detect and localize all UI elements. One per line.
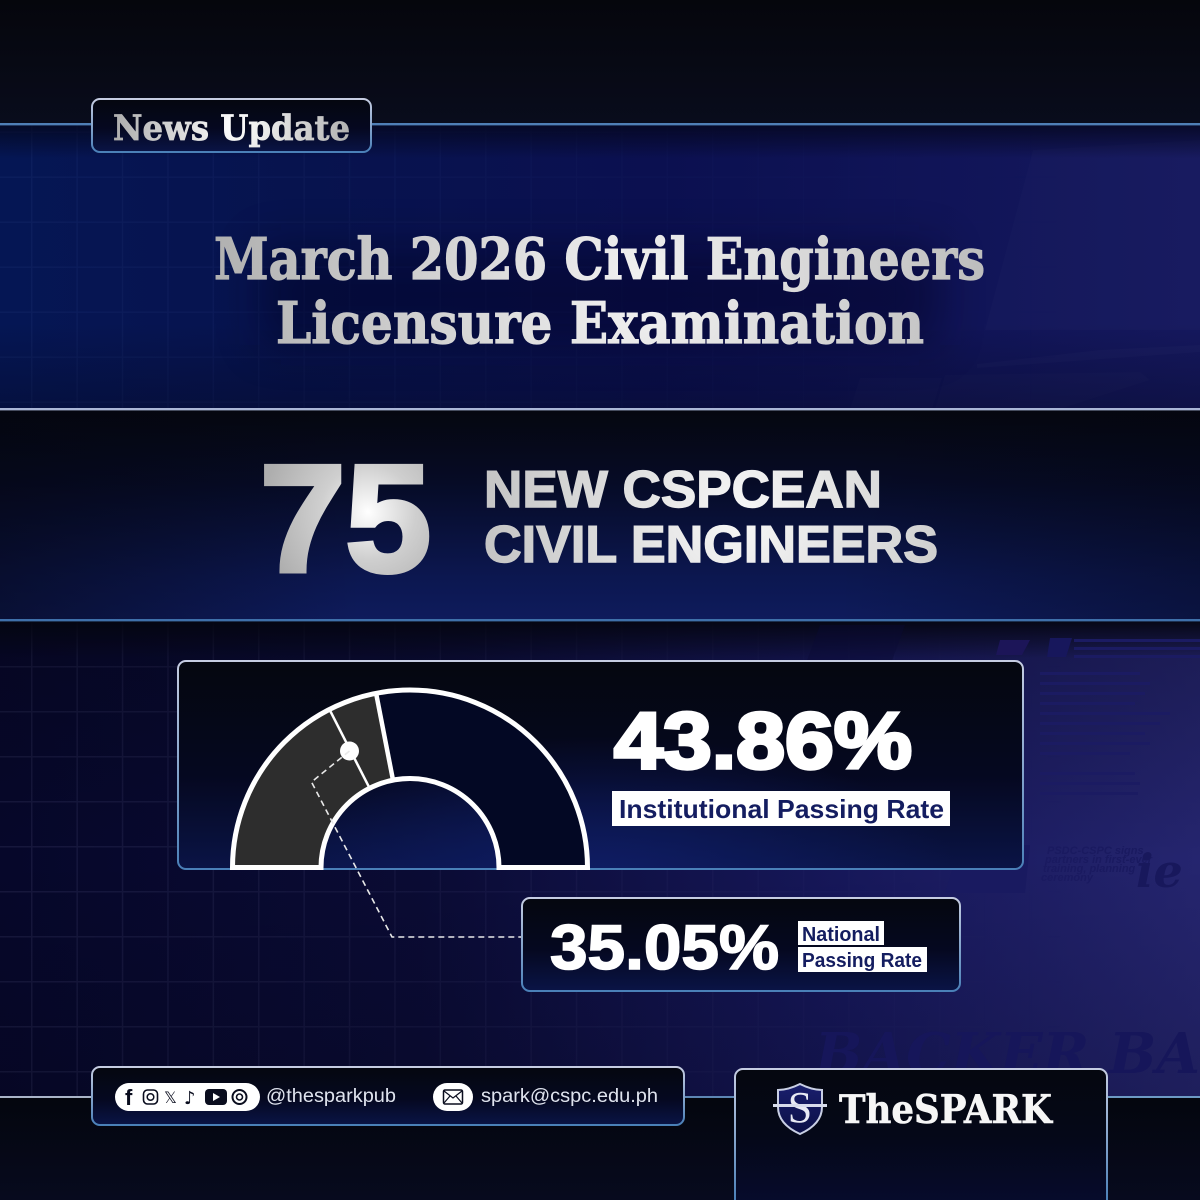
label: National Passing Rate: National: [802, 924, 880, 946]
social icons pill: ♪: [184, 1088, 196, 1109]
background ghost newspaper collage: training, planning: [1043, 863, 1136, 875]
stat: 43.86%: 43.86%: [614, 696, 912, 785]
background ghost newspaper collage: BACKER BA: [813, 1021, 1200, 1087]
tag: News Update: News Update: [113, 108, 350, 149]
panel: national passing rate: [522, 898, 960, 991]
panel: brand logo: [735, 1069, 1107, 1200]
title: Licensure Examination: [276, 290, 924, 357]
background ghost newspaper collage: ceremony: [1041, 872, 1094, 884]
brand name: TheSPARK: [839, 1087, 1054, 1133]
label: National Passing Rate: [798, 921, 927, 972]
background ghost newspaper collage: partners in first-ever: [1044, 854, 1153, 866]
gauge chart: [232, 690, 588, 868]
panel: institutional passing rate: [178, 661, 1023, 869]
background ghost newspaper collage: [800, 625, 1200, 1087]
social handle: @thesparkpub: [266, 1086, 396, 1107]
icon: shield logo: [773, 1083, 827, 1134]
headline text: new civil engineers: CIVIL ENGINEERS: [484, 516, 938, 574]
icon: shield logo: S: [788, 1083, 812, 1132]
stat: 35.05%: 35.05%: [550, 913, 779, 983]
label: National Passing Rate: Passing Rate: [802, 950, 922, 972]
panel: contact footer: [92, 1067, 684, 1125]
headline text: new civil engineers: [484, 461, 938, 574]
social icons pill: 𝕏: [164, 1088, 177, 1107]
headline text: new civil engineers: NEW CSPCEAN: [484, 461, 882, 519]
icon: email: [433, 1083, 473, 1111]
social icons pill: f: [125, 1085, 133, 1110]
title: March 2026 Civil Engineers: [214, 226, 985, 293]
email address: spark@cspc.edu.ph: [481, 1086, 658, 1107]
label: Institutional Passing Rate: Institutional Passing Rate: [619, 794, 944, 824]
title: [214, 226, 985, 357]
background ghost newspaper collage: PSDC-CSPC signs: [1047, 845, 1144, 857]
background ghost newspaper collage: ie: [1136, 844, 1183, 898]
social icons pill: [115, 1083, 260, 1111]
dashed connector from gauge to national rate: [312, 751, 522, 937]
headline stat: 75: 75: [260, 434, 431, 604]
